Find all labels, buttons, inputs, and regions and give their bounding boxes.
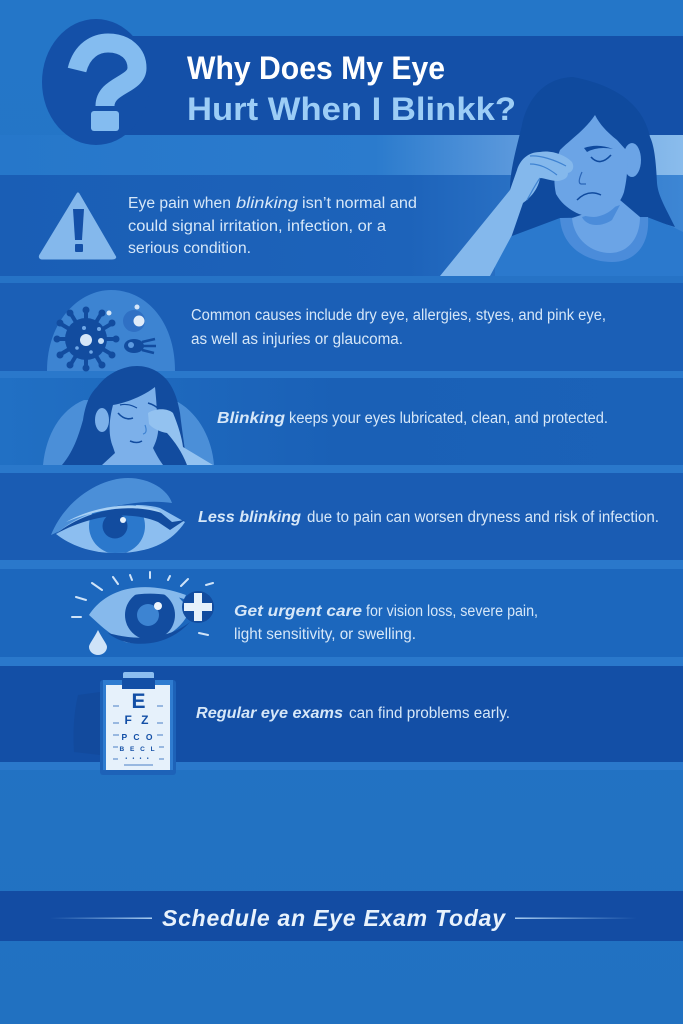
text: blinking: Blinking <box>217 410 286 427</box>
icon: eye chart clipboard: E <box>131 690 146 713</box>
illustration: woman with closed eye <box>43 366 214 465</box>
panel: urgent care <box>0 569 683 666</box>
text: eye exams <box>196 705 510 722</box>
title: Why Does My Eye <box>187 50 445 86</box>
text: eye exams: Regular eye exams <box>196 705 343 722</box>
icon: eye <box>51 478 185 554</box>
icon: eye chart clipboard <box>74 672 176 775</box>
panel: call to action <box>0 891 683 941</box>
icon: warning triangle <box>40 194 115 258</box>
text: warning: could signal irritation, infection, or a <box>128 218 386 235</box>
text: causes: as well as injuries or glaucoma. <box>191 331 403 348</box>
panel: header <box>0 19 683 175</box>
panel: less blinking <box>0 473 683 569</box>
title <box>187 50 516 127</box>
text: warning: Eye pain when <box>128 195 231 212</box>
icon: question mark <box>42 19 150 145</box>
text: causes <box>191 307 606 348</box>
panel: blinking <box>0 366 683 473</box>
text: urgent care: Get urgent care <box>234 603 362 620</box>
icon: eye chart clipboard: B E C L <box>119 746 157 753</box>
text: urgent care <box>234 603 538 643</box>
text: eye exams: can find problems early. <box>349 705 510 722</box>
illustration: woman rubbing eye <box>440 77 683 276</box>
text: warning: serious condition. <box>128 240 251 257</box>
icon: germs <box>47 290 175 372</box>
icon: eye chart clipboard: P C O <box>122 732 154 742</box>
text: warning <box>128 195 417 257</box>
text: causes: Common causes include dry eye, allergies, styes, and pink eye, <box>191 307 606 324</box>
icon: eye with medical cross <box>72 572 214 655</box>
text: blinking: keeps your eyes lubricated, clean, and protected. <box>289 410 608 427</box>
text: warning: blinking <box>236 195 298 212</box>
panel: warning <box>0 77 683 283</box>
text: call to action: Schedule an Eye Exam Today <box>162 905 506 931</box>
text: less blinking: due to pain can worsen dryness and risk of infection. <box>307 509 659 526</box>
title: Hurt When I Blinkk? <box>187 91 516 127</box>
icon: eye chart clipboard: • • • • <box>125 756 151 762</box>
text: less blinking: Less blinking <box>198 509 302 526</box>
panel: eye exams <box>0 666 683 775</box>
icon: eye chart clipboard: F Z <box>124 713 152 727</box>
text: urgent care: light sensitivity, or swelling. <box>234 626 416 643</box>
panel: causes <box>0 283 683 378</box>
text: urgent care: for vision loss, severe pain, <box>366 603 538 620</box>
text: warning: isn’t normal and <box>302 195 417 212</box>
